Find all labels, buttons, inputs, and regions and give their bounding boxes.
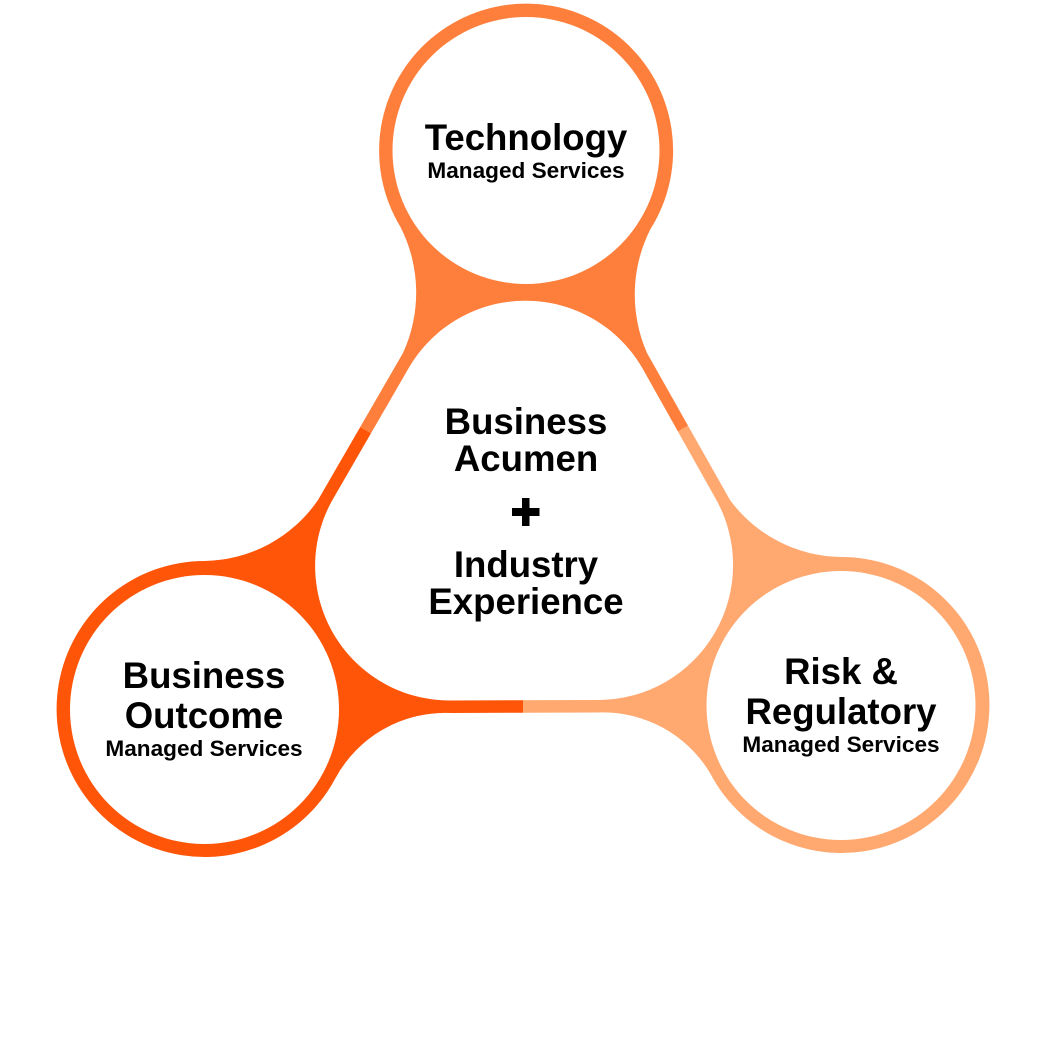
text: centre label: Business: [445, 401, 607, 442]
heading: risk and regulatory: Risk &: [784, 651, 898, 692]
text: centre label: [428, 401, 624, 622]
heading: business outcome: Business: [123, 655, 285, 696]
text: technology subtitle: Managed Services: [427, 158, 625, 183]
panel: technology circle: [392, 17, 660, 284]
panel: risk and regulatory circle: [706, 571, 976, 840]
panel: centre rounded triangle: [315, 301, 733, 700]
segment: business outcome deep orange: [56, 427, 523, 857]
panel: business outcome circle: [70, 575, 339, 844]
text: centre label: Acumen: [454, 438, 598, 479]
panel: business outcome circle: Outcome: [125, 695, 283, 736]
text: centre label: Industry: [454, 544, 599, 585]
text: business outcome subtitle: Managed Services: [105, 736, 303, 761]
heading: technology: Technology: [425, 117, 628, 158]
segment: technology orange: [360, 4, 688, 434]
panel: risk and regulatory circle: Regulatory: [745, 691, 937, 732]
text: centre label: Experience: [428, 581, 624, 622]
connected ring: three coloured segments: [57, 4, 989, 857]
icon: plus: [512, 498, 540, 526]
segment: risk and regulatory light orange: [523, 426, 990, 853]
text: risk subtitle: Managed Services: [742, 732, 940, 757]
